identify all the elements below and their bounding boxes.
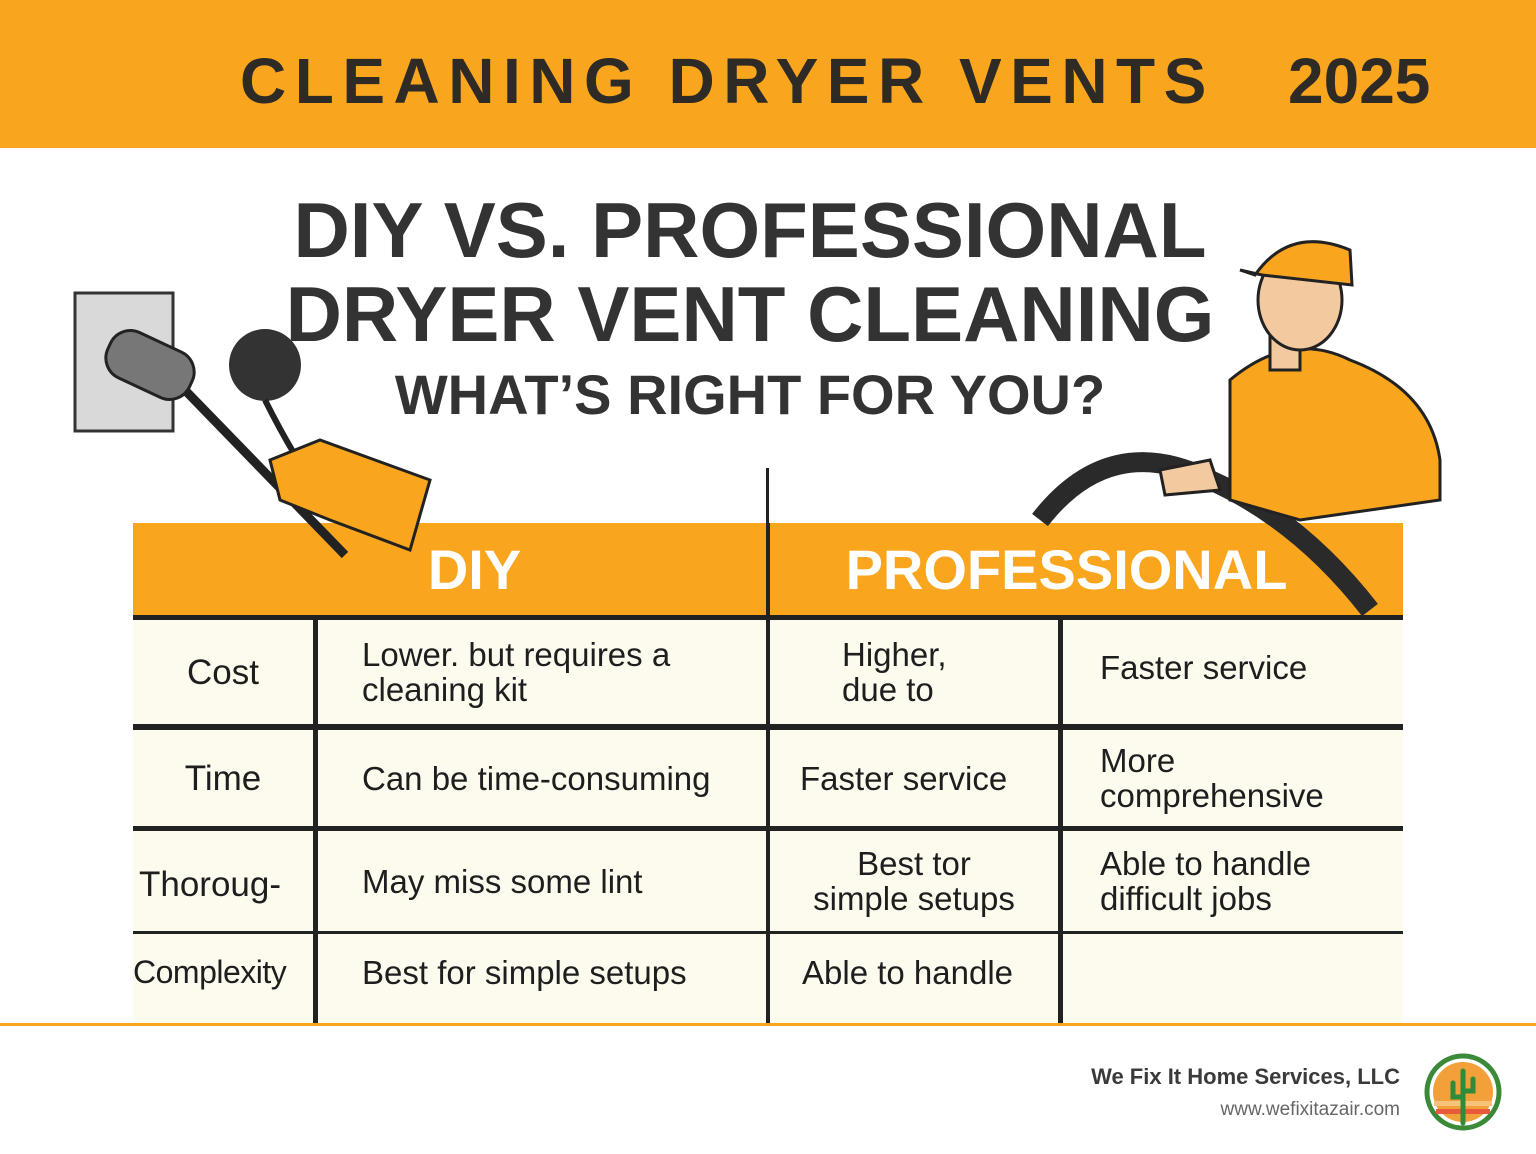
row time: Time: [185, 758, 261, 798]
row cost: cleaning kit: [362, 671, 527, 708]
row thoroughness: Best tor: [857, 845, 971, 882]
row cost: [133, 620, 1403, 724]
top banner: [0, 0, 1536, 148]
row complexity: Complexity: [133, 954, 286, 990]
main heading: DIY VS. PROFESSIONAL: [293, 186, 1207, 274]
row thoroughness: Thoroug-: [139, 864, 281, 904]
row cost: Lower. but requires a: [362, 636, 670, 673]
row thoroughness: May miss some lint: [362, 862, 643, 900]
company name: We Fix It Home Services, LLC: [1091, 1064, 1400, 1089]
banner year: 2025: [1288, 45, 1430, 117]
row thoroughness: Able to handle: [1100, 845, 1311, 882]
row cost: due to: [842, 671, 934, 708]
row time: Faster service: [800, 760, 1007, 796]
row cost: Higher,: [842, 636, 947, 673]
row complexity: Able to handle: [802, 954, 1013, 991]
row time: More: [1100, 742, 1175, 779]
logo: [1424, 1054, 1502, 1130]
row time: Can be time-consuming: [362, 760, 710, 796]
row thoroughness: difficult jobs: [1100, 880, 1272, 917]
illustration: professional worker with hose: [1032, 240, 1442, 615]
comparison table: [133, 523, 1403, 1025]
row thoroughness: simple setups: [813, 880, 1015, 917]
main heading: WHAT’S RIGHT FOR YOU?: [395, 363, 1105, 426]
header DIY: [133, 523, 766, 615]
header PROFESSIONAL: [770, 523, 1403, 615]
row cost: Cost: [187, 652, 259, 692]
header PROFESSIONAL: PROFESSIONAL: [846, 538, 1287, 600]
bottom orange rule: [0, 1023, 1536, 1026]
row cost: Faster service: [1100, 648, 1307, 686]
row complexity: Best for simple setups: [362, 954, 687, 991]
website: www.wefixitazair.com: [1220, 1099, 1400, 1120]
header DIY: DIY: [428, 538, 521, 600]
illustration: DIY brush in vent: [74, 292, 432, 558]
row complexity: [133, 934, 1403, 1023]
main heading: DRYER VENT CLEANING: [286, 270, 1214, 358]
main heading: [286, 186, 1214, 426]
row thoroughness: [133, 831, 1403, 931]
row time: [133, 730, 1403, 826]
divider line: [766, 468, 769, 528]
banner title: CLEANING DRYER VENTS: [240, 45, 1215, 117]
row time: comprehensive: [1100, 777, 1324, 814]
